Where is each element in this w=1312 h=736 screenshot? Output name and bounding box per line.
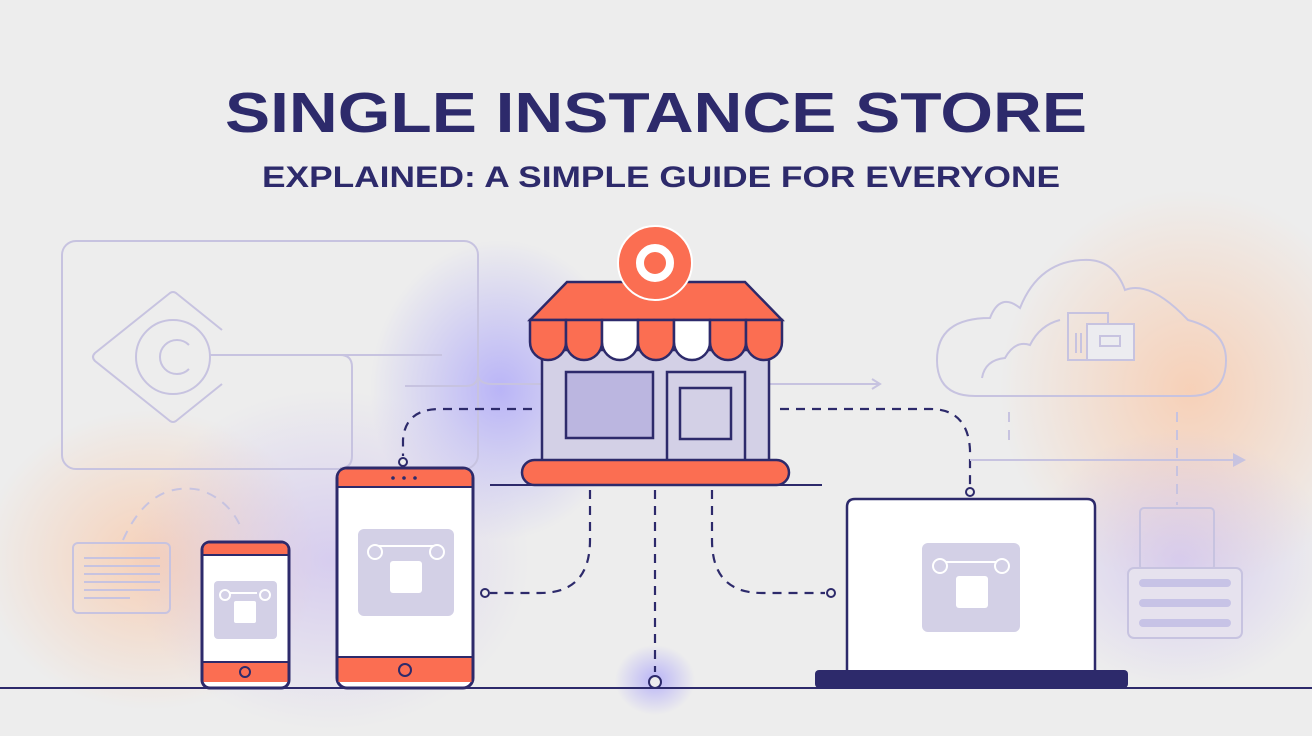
dashed connectors (403, 409, 970, 672)
arrow: right (1233, 453, 1246, 467)
icon: document (73, 489, 242, 613)
icon: diamond eye (93, 292, 222, 422)
device: phone (202, 542, 289, 688)
icon: store badge (618, 226, 692, 300)
subtitle: EXPLAINED: A SIMPLE GUIDE FOR EVERYONE (262, 161, 1060, 194)
icon: storefront (522, 282, 789, 485)
title: SINGLE INSTANCE STORE (225, 81, 1087, 145)
background glows (0, 190, 1312, 730)
icon: cloud storage (937, 260, 1235, 505)
connector end circles (399, 458, 974, 688)
icon: printer (1128, 508, 1242, 638)
store base line (490, 484, 822, 486)
device: laptop (815, 499, 1128, 688)
ground line (0, 687, 1312, 689)
device: tablet (337, 468, 473, 688)
panel: left card graphic (62, 241, 880, 469)
